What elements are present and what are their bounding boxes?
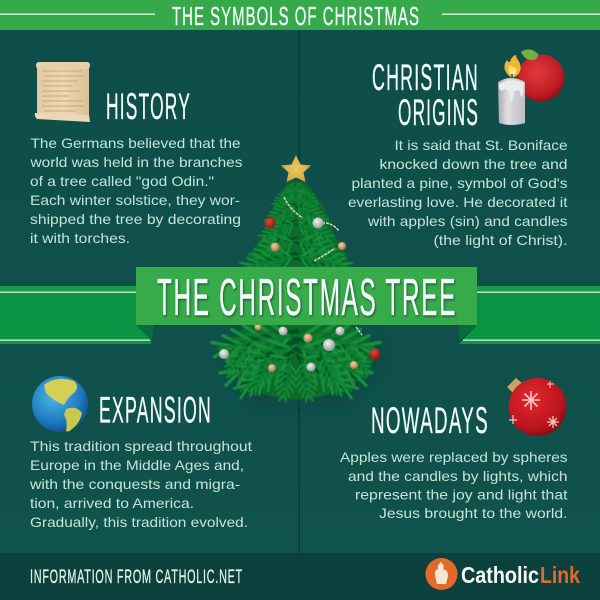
footer source: INFORMATION FROM CATHOLIC.NET (30, 566, 243, 588)
text block: history: world was held in the branches (29, 155, 243, 170)
heading: nowadays: NOWADAYS (371, 400, 489, 441)
christmas tree (210, 155, 385, 406)
text block: nowadays: Apples were replaced by spheres (340, 450, 568, 465)
icon: apple and candle (498, 49, 564, 125)
top title bar (0, 0, 600, 31)
text block: nowadays: and the candles by lights, which (348, 469, 568, 484)
top title bar: THE SYMBOLS OF CHRISTMAS (172, 1, 420, 31)
garland (284, 197, 362, 335)
text block: expansion: with the conquests and migra- (29, 477, 240, 492)
ribbon: right (459, 286, 600, 344)
text block: christian origins: everlasting love. He decorated it (348, 195, 568, 210)
text block: history: Each winter solstice, they wor- (30, 193, 240, 208)
text block: christian origins: with apples (sin) and candles (367, 214, 568, 229)
text block: christian origins (348, 138, 568, 248)
text block: expansion: This tradition spread throughout (30, 439, 252, 454)
logo: catholic link: Catholic (461, 562, 539, 588)
text block: history: The Germans believed that the (30, 136, 240, 151)
ribbon: left (0, 286, 154, 344)
icon: parchment scroll (35, 62, 90, 122)
text block: nowadays: Jesus brought to the world. (379, 506, 568, 521)
text: CHRISTIAN (372, 57, 479, 98)
text: HISTORY (106, 86, 191, 127)
text block: expansion (29, 439, 252, 530)
icon: red ornament (507, 378, 566, 436)
text block: history: it with torches. (30, 231, 130, 246)
heading: christian origins (372, 57, 479, 133)
text block: expansion: Europe in the Middle Ages and, (30, 458, 244, 473)
logo: catholic link (426, 558, 580, 590)
text block: christian origins: knocked down the tree and (380, 157, 568, 172)
text block: expansion: Gradually, this tradition evolved. (30, 515, 248, 530)
text block: history (29, 136, 243, 246)
text block: christian origins: (the light of Christ). (434, 233, 568, 248)
text block: christian origins: planted a pine, symbol of God's (352, 176, 568, 191)
ornaments (219, 218, 380, 372)
text: EXPANSION (99, 390, 212, 430)
text block: nowadays (340, 450, 568, 521)
icon: globe (32, 376, 88, 432)
text block: christian origins: It is said that St. Boniface (394, 138, 568, 153)
text block: nowadays: represent the joy and light that (355, 488, 568, 502)
text block: expansion: tion, arrived to America. (30, 496, 194, 511)
tree shadow (225, 330, 385, 405)
text: ORIGINS (398, 92, 479, 133)
tree foliage (210, 180, 382, 406)
main banner (136, 267, 477, 327)
footer band (0, 553, 600, 600)
text block: history: of a tree called "god Odin." (30, 174, 214, 189)
text block: history: shipped the tree by decorating (30, 212, 241, 227)
logo: catholic link: Link (540, 562, 580, 588)
star (281, 155, 311, 182)
